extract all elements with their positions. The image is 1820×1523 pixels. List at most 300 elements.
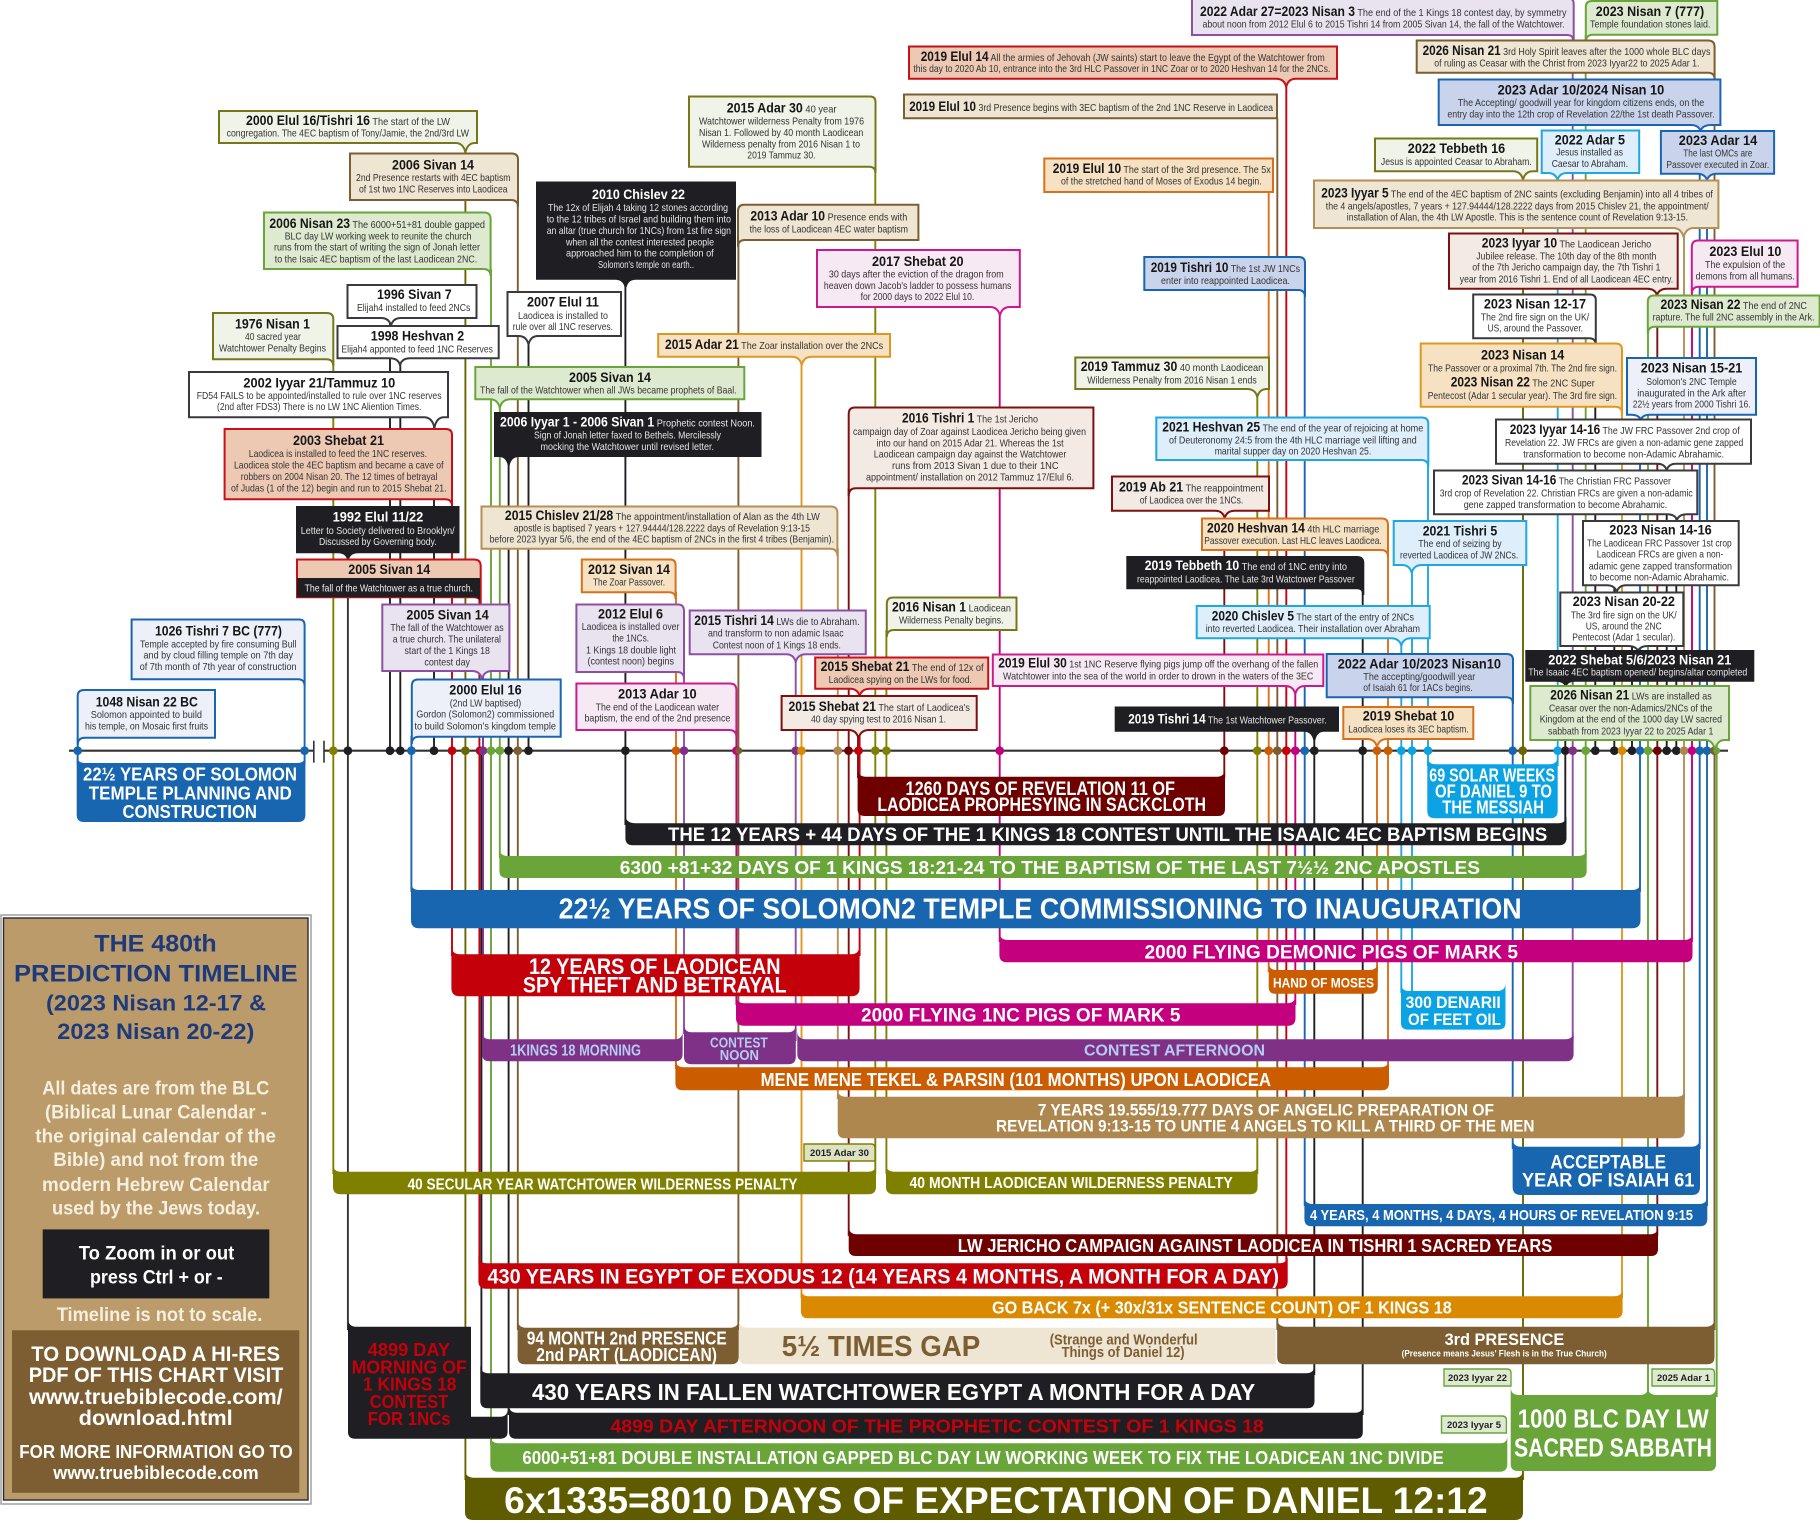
- callout: 2007 Elul 11: Laodicea is installed to: [518, 310, 608, 322]
- callout: 2006 Nisan 23: runs from the start of writing the sign of Jonah letter: [274, 242, 480, 254]
- callout: 2000 Elul 16 blue: (2nd LW baptised): [450, 698, 521, 710]
- callout: 2006 Nisan 23: 2006 Nisan 23 The 6000+51+81 double gapped: [269, 215, 485, 231]
- bar: 69 solar weeks: 69 SOLAR WEEKS: [1429, 765, 1555, 786]
- callout: 2022 Tebbeth 16: Jesus is appointed Ceasar to Abraham.: [1381, 156, 1532, 168]
- bar: 4899 day morning: 1 KINGS 18: [363, 1375, 456, 1395]
- callout: 1026 Tishri 7 BC: Temple accepted by fire consuming Bull: [140, 639, 297, 651]
- bar: 2000 flying 1NC pigs: 2000 FLYING 1NC PIGS OF MARK 5: [861, 1006, 1181, 1027]
- callout: 2023 Nisan 14-16: [1583, 521, 1739, 592]
- callout: 2022 Adar 5: Caesar to Abraham.: [1552, 158, 1628, 170]
- callout: 2012 Elul 6: 1 Kings 18 double light: [586, 644, 676, 656]
- bar: 69 solar weeks: [1427, 756, 1558, 818]
- callout: 2012 Sivan 14: 2012 Sivan 14: [588, 561, 670, 577]
- bar: 3rd presence: [1277, 1318, 1714, 1364]
- callout: 2023 Adar 14: The last OMCs are: [1683, 147, 1753, 159]
- callout: 2019 Elul 30: Watchtower into the sea of the world in order to drown in the waters of the 3EC: [1003, 670, 1314, 682]
- callout: 2019 Tishri 10: 2019 Tishri 10 The 1st JW 1NCs: [1151, 259, 1300, 275]
- callout: 2002 Iyyar 21/Tammuz 10: [189, 372, 448, 428]
- callout: 2023 Adar 10/2024 Nisan 10: [1439, 80, 1720, 131]
- panel: title and information: [1, 915, 311, 1504]
- bar: Solomon temple planning: CONSTRUCTION: [122, 801, 257, 822]
- callout: 2026 Nisan 21 green: Kingdom at the end of the 1000 day LW sacred: [1540, 714, 1722, 726]
- callout: 1048 Nisan 22 BC: Solomon appointed to build: [91, 709, 202, 721]
- callout: 2023 Nisan 20-22: The 3rd fire sign on the UK/: [1571, 609, 1677, 621]
- panel title: 2023 Nisan 20-22): [57, 1019, 254, 1044]
- callout: 2022 Adar 10/2023 Nisan10: of Isaiah 61 for 1ACs begins.: [1363, 682, 1473, 694]
- callout: 2003 Shebat 21: Laodicea stole the 4EC baptism and became a cave of: [234, 459, 444, 471]
- callout: 2026 Nisan 21 green: [1530, 686, 1729, 750]
- callout: 2022 Adar 27=2023 Nisan 3: 2022 Adar 27=2023 Nisan 3 The end of the 1 Kings 18 contest day, by symmetry: [1200, 3, 1567, 19]
- callout: 2023 Nisan 20-22: Pentecost (Adar 1 secular).: [1572, 632, 1675, 644]
- callout: 2012 Elul 6: the 1NCs.: [612, 632, 649, 644]
- callout: 2023 Nisan 12-17: US, around the Passover.: [1488, 323, 1583, 335]
- tag: 2023 Iyyar 22: [1444, 1369, 1511, 1386]
- callout: 2019 Elul 14: this day to 2020 Ab 10, entrance into the 3rd HLC Passover in 1NC Zoar or to 2020 Heshvan 14 for the 2NCs.: [913, 63, 1330, 75]
- callout: 2015 Chislev 21/28: [482, 506, 837, 556]
- callout: 2023 Iyyar 10: year from 2016 Tishri 1. End of all Laodicean 4EC entry.: [1460, 273, 1673, 285]
- calendar note: All dates are from the BLC: [42, 1079, 270, 1100]
- bar: 4 years 4 months: 4 YEARS, 4 MONTHS, 4 DAYS, 4 HOURS OF REVELATION 9:15: [1310, 1207, 1693, 1224]
- callout: 2019 Elul 30: [993, 654, 1323, 694]
- callout: 2010 Chislev 22: Solomon's temple on earth..: [598, 259, 694, 271]
- callout: 2007 Elul 11: [508, 292, 621, 344]
- bar: 40 month penalty: 40 MONTH LAODICEAN WILDERNESS PENALTY: [910, 1175, 1233, 1192]
- download box: FOR MORE INFORMATION GO TO: [19, 1442, 293, 1462]
- bar: 430 years in Egypt: 430 YEARS IN EGYPT OF EXODUS 12 (14 YEARS 4 MONTHS, A MONTH FOR A DAY): [488, 1266, 1279, 1289]
- callout: 2026 Nisan 21 green: sabbath from 2023 Iyyar 22 to 2025 Adar 1: [1548, 725, 1713, 737]
- callout: 2000 Elul 16 blue: [412, 680, 561, 744]
- bar: 4899 day morning: 4899 DAY: [368, 1340, 450, 1360]
- bar: acceptable year of Isaiah 61: ACCEPTABLE: [1550, 1151, 1666, 1173]
- callout: 2006 Sivan 14: of 1st two 1NC Reserves into Laodicea: [359, 183, 508, 195]
- bar: 5½ times gap: [739, 1319, 1276, 1364]
- zoom instructions box: press Ctrl + or -: [90, 1267, 223, 1288]
- callout: 1026 Tishri 7 BC: and by cloud filling temple on 7th day: [144, 650, 294, 662]
- callout: 1992 Elul 11/22: 1992 Elul 11/22: [333, 509, 423, 525]
- tag: 2023 Iyyar 5: 2023 Iyyar 5: [1447, 1420, 1502, 1431]
- bar: 2000 flying 1NC pigs: [736, 995, 1296, 1027]
- callout: 2026 Nisan 21 brown: of ruling as Ceasar with the Christ from 2023 Iyyar22 to 2025 Adar 1.: [1434, 57, 1699, 69]
- callout: 2019 Shebat 10: 2019 Shebat 10: [1363, 708, 1454, 724]
- callout: 2023 Elul 10: [1692, 240, 1798, 294]
- callout: 2016 Nisan 1: 2016 Nisan 1 Laodicean: [892, 599, 1011, 615]
- bar: go back 7x: [801, 1288, 1623, 1318]
- callout: 2000 Elul 16/Tishri 16: [219, 111, 477, 152]
- callout: 2005 Sivan 14 purple: [382, 604, 509, 679]
- callout: 2023 Elul 10: The expulsion of the: [1705, 259, 1785, 271]
- callout: 2019 Tebbeth 10: 2019 Tebbeth 10 The end of 1NC entry into: [1145, 557, 1347, 573]
- bar: 94 month 2nd presence: [518, 1319, 739, 1365]
- calendar note: Bible) and not from the: [53, 1150, 258, 1171]
- bar: 300 denarii: 300 DENARII: [1406, 993, 1501, 1012]
- callout: 2023 Sivan 14-16: 3rd crop of Revelation 22. Christian FRCs are given a non-adamic: [1440, 488, 1693, 500]
- callout: 2021 Heshvan 25: [1156, 418, 1428, 467]
- callout: 2000 Elul 16/Tishri 16: 2000 Elul 16/Tishri 16 The start of the LW: [246, 112, 450, 128]
- callout: 2023 Adar 10/2024 Nisan 10: The Accepting/ goodwill year for kingdom citizens ends, on the: [1458, 97, 1704, 109]
- callout: 2023 Nisan 14-16: to become non-Adamic Abrahamic.: [1590, 571, 1729, 583]
- callout: 2019 Tebbeth 10: reappointed Laodicea. The Late 3rd Watctower Passover: [1137, 573, 1355, 585]
- callout: 1992 Elul 11/22: Discussed by Governing body.: [319, 536, 437, 548]
- callout: 2006 Iyyar 1 - 2006 Sivan 1: 2006 Iyyar 1 - 2006 Sivan 1 Prophetic contest Noon.: [500, 414, 755, 430]
- download box: www.truebiblecode.com: [52, 1463, 259, 1483]
- callout: 2015 Adar 21: 2015 Adar 21 The Zoar installation over the 2NCs: [665, 336, 883, 352]
- bar: 5½ times gap: 5½ TIMES GAP: [782, 1331, 980, 1363]
- callout: 2023 Nisan 22 green: 2023 Nisan 22 The end of 2NC: [1660, 296, 1807, 312]
- callout: 2010 Chislev 22: The 12x of Elijah 4 taking 12 stones according: [548, 202, 728, 214]
- bar: 7 years of angelic preparation: [838, 1089, 1685, 1138]
- callout: 1992 Elul 11/22: Letter to Society delivered to Brooklyn/: [301, 525, 455, 537]
- callout: 2022 Adar 27=2023 Nisan 3: about noon from 2012 Elul 6 to 2015 Tishri 14 from 2005 Sivan 14, the fall of the Watchtower.: [1202, 18, 1565, 30]
- callout: 2021 Heshvan 25: marital supper day on 2020 Heshvan 25.: [1215, 445, 1371, 457]
- bar: 12 years + 44 days: [625, 815, 1566, 846]
- callout: 2017 Shebat 20: 2017 Shebat 20: [872, 253, 964, 269]
- callout: 2019 Tishri 14: 2019 Tishri 14 The 1st Watchtower Passover.: [1128, 710, 1327, 726]
- bar: 4 years 4 months: [1304, 1196, 1707, 1226]
- bar: 1260 days: LAODICEA PROPHESYING IN SACKCLOTH: [877, 794, 1206, 816]
- callout: 2015 Adar 30: 2015 Adar 30 40 year: [727, 100, 837, 116]
- callout: 2006 Iyyar 1 - 2006 Sivan 1: [495, 413, 760, 465]
- download box: [12, 1330, 299, 1493]
- callout: 2019 Elul 14: [909, 46, 1337, 87]
- callout: 2017 Shebat 20: for 2000 days to 2022 Elul 10.: [861, 291, 974, 303]
- callout: 2023 Nisan 15-21: 22½ years from 2000 Tishri 16.: [1633, 399, 1751, 411]
- callout: 1048 Nisan 22 BC: 1048 Nisan 22 BC: [96, 693, 198, 709]
- callout: 2023 Iyyar 5: [1314, 180, 1718, 237]
- panel title: [14, 931, 298, 1044]
- callout: 2021 Heshvan 25: of Deuteronomy 24:5 from the 4th HLC marriage veil lifting and: [1169, 434, 1417, 446]
- bar: 4899 day afternoon: 4899 DAY AFTERNOON OF THE PROPHETIC CONTEST OF 1 KINGS 18: [610, 1416, 1264, 1437]
- callout: 2015 Shebat 21 dark red: [782, 696, 977, 738]
- bar: 6000+51+81: 6000+51+81 DOUBLE INSTALLATION GAPPED BLC DAY LW WORKING WEEK TO FIX THE LOADICEAN 1NC DIVIDE: [522, 1448, 1444, 1468]
- bar: 1260 days: [858, 768, 1225, 816]
- callout: 2013 Adar 10 magenta: [576, 684, 736, 737]
- bar: 1 Kings 18 morning: [482, 1031, 683, 1061]
- panel title: (2023 Nisan 12-17 &: [46, 990, 266, 1015]
- callout: 2016 Tishri 1: into our hand on 2015 Adar 21. Whereas the 1st: [876, 438, 1064, 450]
- callout: 2006 Sivan 14: 2nd Presence restarts with 4EC baptism: [356, 172, 511, 184]
- bar: 12 years + 44 days: THE 12 YEARS + 44 DAYS OF THE 1 KINGS 18 CONTEST UNTIL THE ISAAIC 4EC BAPTISM BEGINS: [668, 825, 1547, 846]
- bar: 7 years of angelic preparation: REVELATION 9:13-15 TO UNTIE 4 ANGELS TO KILL A THIRD OF THE MEN: [996, 1117, 1534, 1136]
- callout: 2007 Elul 11: 2007 Elul 11: [527, 294, 599, 310]
- callout: 2013 Adar 10 presence ends: [738, 205, 918, 247]
- tag: 2025 Adar 1: [1652, 1369, 1714, 1386]
- callout: 2019 Tishri 10: [1144, 257, 1305, 297]
- callout: 2019 Tishri 10: enter into reappointed Laodicea.: [1161, 275, 1290, 287]
- callout: 2022 Tebbeth 16: [1375, 138, 1537, 180]
- callout: 2023 Adar 14: Passover executed in Zoar.: [1666, 159, 1769, 171]
- bar: 1260 days: 1260 DAYS OF REVELATION 11 OF: [906, 778, 1175, 800]
- callout: 2002 Iyyar 21/Tammuz 10: 2002 Iyyar 21/Tammuz 10: [243, 374, 395, 390]
- callout: 2023 Iyyar 10: Jubilee release. The 10th day of the 8th month: [1476, 250, 1657, 262]
- bar: 4899 day afternoon: [509, 1405, 1363, 1439]
- callout: 2015 Shebat 21 red: 2015 Shebat 21 The end of 12x of: [821, 658, 984, 674]
- bar: 5½ times gap: Things of Daniel 12): [1062, 1344, 1185, 1361]
- callout: 2022 Adar 5: Jesus installed as: [1556, 147, 1623, 159]
- callout: 2023 Sivan 14-16: [1434, 470, 1697, 520]
- bar: 40 month penalty: [886, 1164, 1258, 1194]
- callout: 1996 Sivan 7: Elijah4 installed to feed 2NCs: [357, 302, 470, 314]
- callout: 2015 Shebat 21 red: [815, 658, 988, 696]
- bar: contest afternoon: CONTEST AFTERNOON: [1084, 1043, 1265, 1060]
- download box: www.truebiblecode.com/: [28, 1386, 283, 1409]
- callout: 1998 Heshvan 2: [338, 326, 499, 365]
- bar: 12 years of Laodicean spy theft: SPY THEFT AND BETRAYAL: [523, 973, 787, 998]
- callout: 2021 Heshvan 25: 2021 Heshvan 25 The end of the year of rejoicing at home: [1162, 419, 1423, 435]
- callout: 2023 Nisan 12-17: The 2nd fire sign on the UK/: [1481, 311, 1589, 323]
- callout: 2023 Adar 10/2024 Nisan 10: 2023 Adar 10/2024 Nisan 10: [1498, 82, 1664, 98]
- callout: 2015 Adar 30: 2019 Tammuz 30.: [747, 150, 816, 162]
- callout: 2000 Elul 16 blue: Gordon (Solomon2) commissioned: [416, 709, 554, 721]
- callout: 2023 Iyyar 10: [1449, 234, 1678, 295]
- zoom instructions box: [43, 1229, 269, 1298]
- bar: 4899 day morning: MORNING OF: [352, 1357, 467, 1377]
- callout: 2023 Iyyar 10: of the 7th Jericho campaign day, the 7th Tishri 1: [1472, 262, 1661, 274]
- callout: 2023 Nisan 14-16: Laodicean FRCs are given a non-: [1597, 549, 1724, 561]
- callout: 1976 Nisan 1: 1976 Nisan 1: [235, 315, 310, 331]
- callout: 2023 Adar 10/2024 Nisan 10: entry day into the 12th crop of Revelation 22/the 1st death Passover.: [1447, 108, 1715, 120]
- callout: 2010 Chislev 22: approached him to the completion of: [566, 248, 714, 260]
- download box: TO DOWNLOAD A HI-RES: [31, 1343, 280, 1366]
- callout: 2003 Shebat 21: [225, 429, 452, 506]
- bar: 1 Kings 18 morning: 1KINGS 18 MORNING: [510, 1043, 641, 1060]
- callout: 2003 Shebat 21: Laodicea is installed to feed the 1NC reserves.: [249, 448, 427, 460]
- callout: 2016 Tishri 1: campaign day of Zoar against Laodicea Jericho being given: [853, 426, 1086, 438]
- bar: mene mene tekel: [675, 1059, 1389, 1090]
- callout: 1048 Nisan 22 BC: his temple, on Mosaic first fruits: [85, 720, 208, 732]
- bar: 3rd presence: 3rd PRESENCE: [1445, 1330, 1564, 1349]
- callout: 2023 Adar 14: 2023 Adar 14: [1679, 132, 1757, 148]
- callout: 2023 Nisan 15-21: Solomon's 2NC Temple: [1646, 376, 1737, 388]
- callout: 2020 Heshvan 14: Passover execution. Last HLC leaves Laodicea.: [1204, 535, 1382, 547]
- bar: acceptable year of Isaiah 61: [1513, 1138, 1700, 1195]
- callout: 2023 Sivan 14-16: gene zapped transformation to become Abrahamic.: [1464, 499, 1667, 511]
- download box: PDF OF THIS CHART VISIT: [29, 1364, 283, 1387]
- calendar note: [35, 1079, 276, 1220]
- bar: acceptable year of Isaiah 61: YEAR OF ISAIAH 61: [1522, 1170, 1695, 1192]
- bar: 4899 day morning: [348, 1318, 508, 1439]
- callout: 2015 Chislev 21/28: before 2023 Iyyar 5/6, the end of the 4EC baptism of 2NCs in the first 4 tribes (Benjamin).: [490, 534, 834, 546]
- callout: 2012 Sivan 14: The Zoar Passover.: [593, 577, 665, 589]
- callout: 2003 Shebat 21: of Judas (1 of the 12) begin and run to 2015 Shebat 21.: [231, 482, 447, 494]
- callout: 2026 Nisan 21 green: 2026 Nisan 21 LWs are installed as: [1550, 686, 1712, 702]
- bar: hand of Moses: HAND OF MOSES: [1273, 976, 1374, 990]
- bar: contest noon: [684, 1024, 796, 1064]
- callout: 2012 Elul 6: [576, 604, 684, 679]
- bar: 6x1335 expectation: 6x1335=8010 DAYS OF EXPECTATION OF DANIEL 12:12: [504, 1480, 1488, 1521]
- callout: 2023 Nisan 14 and 22: 2023 Nisan 14: [1481, 346, 1564, 362]
- callout: 2023 Nisan 14 and 22: Pentecost (Adar 1 secular year). The 3rd fire sign.: [1428, 390, 1617, 402]
- callout: 1976 Nisan 1: 40 sacred year: [245, 331, 301, 343]
- callout: 1976 Nisan 1: [213, 313, 333, 366]
- download box: download.html: [79, 1407, 233, 1430]
- callout: 2006 Nisan 23: BLC day LW working week to reunite the church: [285, 230, 472, 242]
- callout: 2006 Sivan 14: 2006 Sivan 14: [392, 156, 474, 172]
- callout: 2002 Iyyar 21/Tammuz 10: FD54 FAILS to be appointed/installed to rule over 1NC reserves: [197, 390, 442, 402]
- callout: 2023 Sivan 14-16: 2023 Sivan 14-16 The Christian FRC Passover: [1462, 472, 1671, 488]
- callout: 2010 Chislev 22: [537, 182, 735, 287]
- callout: 2023 Nisan 14 and 22: [1421, 344, 1622, 413]
- bar: 22½ years commissioning: [411, 882, 1640, 928]
- callout: 2023 Iyyar 14-16: 2023 Iyyar 14-16 The JW FRC Passover 2nd crop of: [1510, 421, 1740, 437]
- callout: 2005 Sivan 14 green: [475, 367, 744, 408]
- bar: 3rd presence: (Presence means Jesus' Flesh is in the True Church): [1402, 1349, 1607, 1360]
- callout: 2021 Tishri 5: The end of seizing by: [1418, 538, 1502, 550]
- callout: 2023 Nisan 7 (777): [1586, 1, 1717, 42]
- callout: 2005 Sivan 14 green: The fall of the Watchtower when all JWs became prophets of Baal.: [480, 385, 737, 397]
- callout: 2023 Iyyar 14-16: Revelation 22. JW FRCs are given a non-adamic gene zapped: [1505, 437, 1743, 449]
- callout: 2022 Shebat 5/6/2023 Nisan 21: 2022 Shebat 5/6/2023 Nisan 21: [1548, 651, 1731, 667]
- bar: 4899 day morning: CONTEST: [370, 1392, 448, 1412]
- callout: 2005 Sivan 14 red and black: [297, 560, 481, 604]
- callout: 2021 Tishri 5: [1394, 521, 1526, 573]
- callout: 1996 Sivan 7: 1996 Sivan 7: [377, 286, 452, 302]
- bar: go back 7x: GO BACK 7x (+ 30x/31x SENTENCE COUNT) OF 1 KINGS 18: [992, 1298, 1452, 1318]
- callout: 2015 Tishri 14: 2015 Tishri 14 LWs die to Abraham.: [694, 612, 860, 628]
- callout: 2022 Adar 10/2023 Nisan10: 2022 Adar 10/2023 Nisan10: [1338, 655, 1501, 671]
- callout: 2023 Nisan 14 and 22: 2023 Nisan 22 The 2NC Super: [1451, 374, 1595, 390]
- bar: contest noon: CONTEST: [710, 1035, 768, 1051]
- callout: 2016 Tishri 1: Laodicean campaign day against the Watchtower: [874, 449, 1067, 461]
- callout: 2012 Elul 6: Laodicea is installed over: [582, 621, 680, 633]
- callout: 2010 Chislev 22: to the 12 tribes of Israel and building them into: [547, 214, 731, 226]
- callout: 2005 Sivan 14 red and black: 2005 Sivan 14: [348, 561, 430, 577]
- callout: 2000 Elul 16/Tishri 16: congregation. The 4EC baptism of Tony/Jamie, the 2nd/3rd LW: [227, 128, 469, 140]
- bar: 2000 flying demonic pigs: [999, 932, 1692, 964]
- callout: 2013 Adar 10 magenta: 2013 Adar 10: [618, 686, 697, 702]
- bar: 22½ years commissioning: 22½ YEARS OF SOLOMON2 TEMPLE COMMISSIONING TO INAUGURATION: [559, 893, 1522, 925]
- callout: 2023 Nisan 7 (777): Temple foundation stones laid.: [1590, 19, 1710, 31]
- zoom instructions box: To Zoom in or out: [79, 1244, 235, 1265]
- callout: 2016 Tishri 1: runs from 2013 Sivan 1 due to their 1NC: [892, 460, 1059, 472]
- bar: 4899 day morning: FOR 1NCs: [368, 1409, 451, 1429]
- bar: 69 solar weeks: THE MESSIAH: [1442, 796, 1544, 817]
- callout: 2005 Sivan 14 green: 2005 Sivan 14: [569, 369, 651, 385]
- callout: 2023 Nisan 15-21: inaugurated in the Ark after: [1637, 387, 1746, 399]
- callout: 2020 Chislev 5: into reverted Laodicea. Their installation over Abraham: [1206, 623, 1420, 635]
- callout: 2017 Shebat 20: heaven down Jacob's ladder to possess humans: [824, 280, 1011, 292]
- tag: 2015 Adar 30: [804, 1144, 875, 1161]
- callout: 2019 Elul 30: 2019 Elul 30 1st 1NC Reserve flying pigs jump off the overhang of the fallen: [998, 654, 1318, 670]
- callout: 2015 Shebat 21 dark red: 2015 Shebat 21 The start of Laodicea's: [788, 698, 970, 714]
- callout: 2013 Adar 10 magenta: baptism, the end of the 2nd presence: [584, 713, 730, 725]
- bar: hand of Moses: [1269, 962, 1378, 994]
- callout: 2022 Tebbeth 16: 2022 Tebbeth 16: [1408, 140, 1505, 156]
- callout: 2020 Chislev 5: 2020 Chislev 5 The start of the entry of 2NCs: [1212, 608, 1414, 624]
- bar: 40 secular year penalty: 40 SECULAR YEAR WATCHTOWER WILDERNESS PENALTY: [408, 1176, 798, 1193]
- callout: 1048 Nisan 22 BC: [78, 690, 215, 745]
- callout: 1026 Tishri 7 BC: of 7th month of 7th year of construction: [140, 661, 297, 673]
- tag: 2023 Iyyar 5: [1442, 1416, 1506, 1433]
- callout: 2016 Nisan 1: [887, 598, 1016, 637]
- callout: 2017 Shebat 20: [817, 250, 1020, 316]
- tag: 2025 Adar 1: 2025 Adar 1: [1657, 1373, 1711, 1384]
- callout: 2015 Adar 30: Wilderness penalty from 2016 Nisan 1 to: [702, 138, 860, 150]
- bar: 2000 flying demonic pigs: 2000 FLYING DEMONIC PIGS OF MARK 5: [1144, 943, 1518, 964]
- callout: 2012 Elul 6: (contest noon) begins: [588, 655, 674, 667]
- callout: 2015 Tishri 14: Contest noon of 1 Kings 18 ends.: [713, 639, 841, 651]
- callout: 2023 Nisan 12-17: [1473, 294, 1596, 345]
- callout: 1992 Elul 11/22: [297, 507, 458, 559]
- callout: 2023 Nisan 15-21: [1627, 358, 1756, 420]
- bar: contest afternoon: [797, 1031, 1574, 1061]
- callout: 2016 Nisan 1: Wilderness Penalty begins.: [899, 615, 1004, 627]
- panel title: PREDICTION TIMELINE: [14, 960, 298, 987]
- callout: 2022 Shebat 5/6/2023 Nisan 21: The Isaaic 4EC baptism opened/ begins/altar completed: [1528, 667, 1747, 679]
- callout: 1026 Tishri 7 BC: [132, 620, 305, 686]
- callout: 1998 Heshvan 2: 1998 Heshvan 2: [371, 328, 464, 344]
- callout: 2005 Sivan 14 purple: The fall of the Watchtower as: [390, 622, 504, 634]
- callout: 2010 Chislev 22: 2010 Chislev 22: [592, 186, 685, 202]
- callout: 2021 Tishri 5: 2021 Tishri 5: [1423, 522, 1497, 538]
- bar: 300 denarii: [1401, 983, 1506, 1030]
- callout: 2021 Tishri 5: reverted Laodicea of JW 2NCs.: [1400, 549, 1518, 561]
- bar: 5½ times gap: (Strange and Wonderful: [1050, 1331, 1198, 1348]
- callout: 2023 Nisan 22 green: [1648, 296, 1820, 334]
- bar: 1000 BLC day sabbath: 1000 BLC DAY LW: [1518, 1404, 1709, 1434]
- callout: 2019 Elul 10 orange: [1044, 158, 1273, 192]
- bar: 6000+51+81: [490, 1435, 1507, 1472]
- bar: 69 solar weeks: OF DANIEL 9 TO: [1435, 780, 1552, 801]
- callout: 2023 Adar 14: [1661, 131, 1774, 180]
- callout: 2020 Chislev 5: [1197, 606, 1430, 646]
- callout: 2022 Adar 10/2023 Nisan10: The accepting/goodwill year: [1363, 671, 1476, 683]
- callout: 2016 Tishri 1: 2016 Tishri 1 The 1st Jericho: [902, 410, 1038, 426]
- callout: 2023 Iyyar 14-16: transformation to become non-Adamic Abrahamic.: [1523, 448, 1724, 460]
- callout: 2015 Chislev 21/28: 2015 Chislev 21/28 The appointment/installation of Alan as the 4th LW: [505, 507, 820, 523]
- bar: 6300 days: 6300 +81+32 DAYS OF 1 KINGS 18:21-24 TO THE BAPTISM OF THE LAST 7½½ 2NC APOSTLES: [620, 857, 1480, 878]
- main horizontal timeline with break marks: [69, 741, 1728, 763]
- calendar note: used by the Jews today.: [52, 1199, 260, 1220]
- callout: 2015 Shebat 21 red: Laodicea spying on the LWs for food.: [829, 674, 972, 686]
- bar: LW Jericho campaign: [849, 1226, 1658, 1256]
- callout: 2006 Sivan 14: [350, 154, 518, 207]
- callout: 2023 Iyyar 5: 2023 Iyyar 5 The end of the 4EC baptism of 2NC saints (excluding Benjamin) into all 4 tribes of: [1321, 184, 1713, 200]
- scale note: Timeline is not to scale.: [57, 1305, 262, 1326]
- callout: 2023 Nisan 12-17: 2023 Nisan 12-17: [1484, 295, 1586, 311]
- callout: 2023 Nisan 15-21: 2023 Nisan 15-21: [1641, 360, 1742, 376]
- bar: contest noon: NOON: [720, 1048, 759, 1064]
- callout: 2010 Chislev 22: when all the contest interested people: [565, 236, 714, 248]
- callout: 2015 Adar 30: Nisan 1. Followed by 40 month Laodicean: [699, 127, 863, 139]
- callout: 2013 Adar 10 presence ends: the loss of Laodicean 4EC water baptism: [750, 223, 908, 235]
- callout: 2007 Elul 11: rule over all 1NC reserves.: [513, 321, 613, 333]
- calendar note: (Biblical Lunar Calendar -: [45, 1102, 267, 1124]
- callout: 2000 Elul 16 blue: to build Solomon's kingdom temple: [414, 720, 556, 732]
- callout: 2026 Nisan 21 green: Ceasar over the non-Adamics/2NCs of the: [1549, 702, 1712, 714]
- bar: LW Jericho campaign: LW JERICHO CAMPAIGN AGAINST LAODICEA IN TISHRI 1 SACRED YEARS: [958, 1235, 1552, 1256]
- bar: 94 month 2nd presence: 2nd PART (LAODICEAN): [536, 1345, 717, 1365]
- callout: 2005 Sivan 14 purple: a true church. The unilateral: [393, 633, 501, 645]
- callout: 2023 Iyyar 5: installation of Alan, the 4th LW Apostle. This is the sentence count of Revelation 9:13-15.: [1347, 211, 1688, 223]
- bar: Solomon temple planning: [77, 755, 305, 822]
- callout: 2015 Shebat 21 dark red: 40 day spying test to 2016 Nisan 1.: [811, 714, 946, 726]
- bar: 430 years in fallen Watchtower Egypt: 430 YEARS IN FALLEN WATCHTOWER EGYPT A MONTH FOR A DAY: [532, 1379, 1255, 1405]
- callout: 2026 Nisan 21 brown: 2026 Nisan 21 3rd Holy Spirit leaves after the 1000 whole BLC days: [1423, 42, 1710, 58]
- callout: 2005 Sivan 14 red and black: The fall of the Watchtower as a true church.: [305, 583, 473, 595]
- callout: 1026 Tishri 7 BC: 1026 Tishri 7 BC (777): [155, 623, 282, 639]
- callout: 2019 Ab 21: of Laodicea over the 1NCs.: [1140, 494, 1243, 506]
- bar: 430 years in Egypt: [478, 1255, 1288, 1289]
- bar: 6300 days: [499, 848, 1587, 878]
- callout: 2022 Adar 5: [1542, 130, 1639, 180]
- calendar note: the original calendar of the: [35, 1126, 276, 1147]
- callout: 2019 Elul 10 orange: of the stretched hand of Moses of Exodus 14 begin.: [1061, 176, 1262, 188]
- callout: 2022 Adar 27=2023 Nisan 3: [1192, 0, 1574, 42]
- bar: 40 secular year penalty: [333, 1164, 876, 1194]
- callout: 2006 Iyyar 1 - 2006 Sivan 1: Sign of Jonah letter faxed to Bethels. Mercilessly: [534, 430, 722, 442]
- bar: 430 years in fallen Watchtower Egypt: [480, 1365, 1314, 1408]
- callout: 2017 Shebat 20: 30 days after the eviction of the dragon from: [829, 268, 1004, 280]
